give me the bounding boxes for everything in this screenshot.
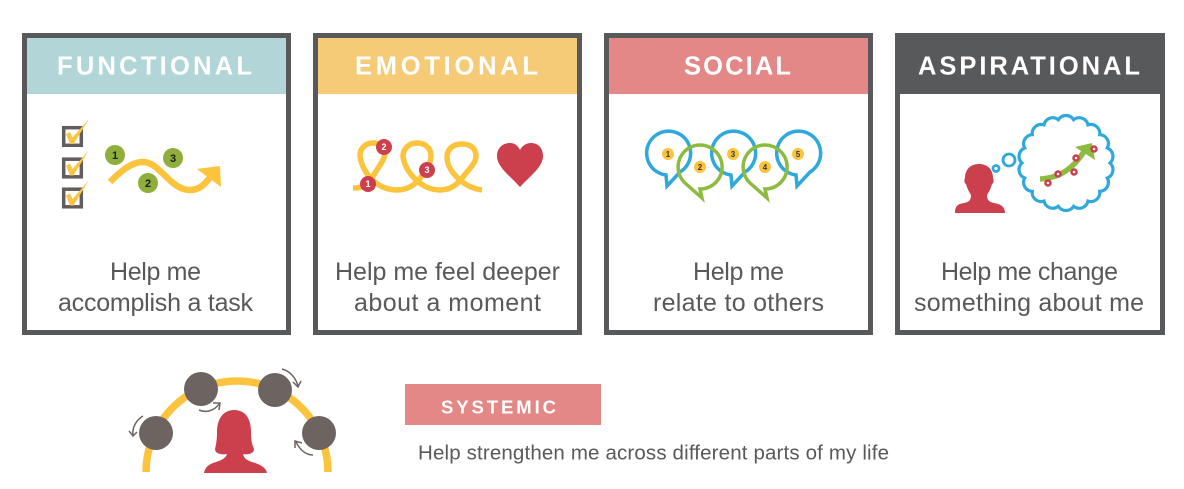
- icon: thought bubbles: [993, 154, 1015, 172]
- panel: systemic label: SYSTEMIC: [441, 396, 556, 418]
- heading: emotional: [318, 38, 577, 94]
- icon: wavy arrow with steps: 1: [112, 150, 118, 162]
- text: aspirational description: Help me change: [941, 258, 1118, 286]
- panel: social: [606, 36, 870, 332]
- icon: woman silhouette: [204, 410, 267, 473]
- icon: speech bubbles: 3: [731, 150, 736, 159]
- panel: functional: [24, 36, 288, 332]
- text: systemic description: Help strengthen me across different parts of my life: [418, 442, 889, 464]
- text: aspirational description: [914, 258, 1144, 317]
- icon: heart: [497, 143, 543, 187]
- panel: aspirational: [895, 33, 1165, 332]
- icon: wavy arrow with steps: 3: [170, 153, 176, 165]
- text: social description: Help me: [693, 258, 784, 286]
- icon: checklist: [64, 119, 89, 207]
- icon: looping path: 3: [424, 165, 430, 175]
- icon: speech bubbles: 4: [763, 163, 768, 172]
- text: aspirational description: something about me: [914, 289, 1144, 317]
- icon: person silhouette: [955, 164, 1005, 213]
- text: functional description: Help me: [110, 258, 201, 286]
- icon: thought cloud with rising arrow: [1019, 116, 1113, 210]
- heading: social: [609, 38, 868, 94]
- heading: aspirational: [895, 33, 1165, 94]
- icon: speech bubbles: 2: [698, 163, 703, 172]
- icon: wavy arrow with steps: [105, 145, 221, 193]
- heading: functional: [27, 38, 286, 94]
- heading: aspirational: ASPIRATIONAL: [918, 52, 1140, 80]
- text: emotional description: [335, 258, 560, 317]
- icon: looping path: 2: [381, 142, 387, 152]
- icon: rotation arrows: [129, 369, 313, 455]
- icon: speech bubbles: [647, 131, 821, 198]
- text: social description: relate to others: [653, 289, 824, 317]
- text: functional description: [58, 258, 254, 317]
- heading: emotional: EMOTIONAL: [355, 52, 538, 80]
- icon: systemic arc with circles and person: [129, 369, 336, 473]
- panel: emotional: [316, 36, 580, 332]
- heading: functional: FUNCTIONAL: [57, 52, 252, 80]
- heading: social: SOCIAL: [684, 52, 791, 80]
- text: emotional description: about a moment: [354, 289, 541, 317]
- text: social description: [653, 258, 824, 317]
- text: functional description: accomplish a task: [58, 289, 254, 317]
- icon: looping path: 1: [365, 179, 371, 189]
- icon: looping path: [353, 139, 482, 192]
- icon: speech bubbles: 5: [796, 150, 801, 159]
- icon: speech bubbles: 1: [666, 150, 671, 159]
- text: emotional description: Help me feel deeper: [335, 258, 560, 286]
- icon: wavy arrow with steps: 2: [145, 178, 151, 190]
- panel: systemic label: [405, 384, 601, 425]
